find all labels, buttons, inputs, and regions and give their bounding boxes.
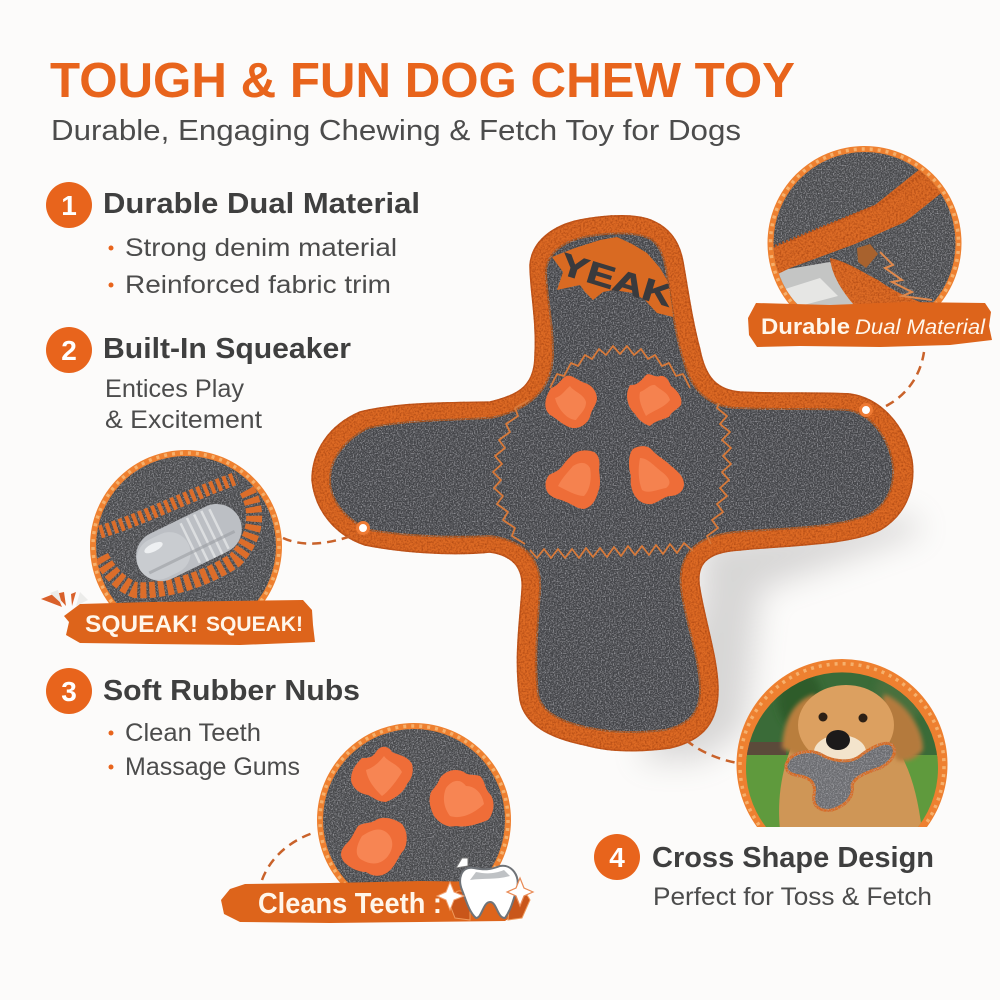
rubber nub bottom-right	[629, 446, 684, 504]
rubber nub top-right	[627, 374, 681, 426]
callout banner: cleans teeth: Cleans Teeth :	[258, 888, 442, 920]
feature 4: cross shape design: 4	[609, 842, 625, 873]
feature 2: built-in squeaker	[46, 327, 351, 434]
cross-shaped chew toy	[312, 216, 913, 751]
detail circle: dog with toy	[736, 659, 950, 830]
dashed connector to dog photo	[686, 740, 738, 763]
dog	[779, 685, 923, 830]
squeaker capsule	[136, 504, 242, 582]
dashed connector to nubs	[262, 832, 316, 880]
detail circle: squeaker	[90, 450, 282, 604]
detail circle: rubber nubs	[317, 723, 511, 883]
callout banner: squeak squeak	[64, 600, 315, 645]
callout banner: cleans teeth	[221, 881, 522, 923]
feature 2: built-in squeaker: Built-In Squeaker	[103, 333, 351, 365]
detail circle: fabric trim	[768, 146, 962, 305]
rubber nub bottom-left	[545, 450, 600, 509]
icon: tooth with sparkles	[437, 858, 533, 920]
callout banner: durable dual material	[748, 302, 992, 347]
feature 4: cross shape design: Perfect for Toss & Fetch	[653, 883, 932, 911]
feature 1: durable dual material: 1	[61, 190, 77, 221]
rubber nub top-left	[545, 376, 597, 428]
title: TOUGH & FUN DOG CHEW TOY	[50, 54, 795, 108]
YEAK logo	[552, 237, 678, 317]
feature 3: soft rubber nubs	[46, 668, 360, 781]
feature 1: durable dual material: Durable Dual Material	[103, 188, 420, 220]
attachment dot right	[860, 404, 872, 416]
feature 3: soft rubber nubs: Clean Teeth	[125, 719, 261, 747]
feature 1: durable dual material	[46, 182, 420, 299]
callout banner: squeak squeak: SQUEAK!	[206, 613, 303, 636]
callout banner: durable dual material: Dual Material	[855, 316, 986, 339]
feature 2: built-in squeaker: Entices Play	[105, 375, 245, 403]
feature 3: soft rubber nubs: 3	[61, 676, 77, 707]
feature 3: soft rubber nubs: Massage Gums	[125, 753, 300, 781]
feature 4: cross shape design: Cross Shape Design	[652, 842, 934, 874]
squeak burst rays	[41, 590, 88, 607]
feature 1: durable dual material: Strong denim material	[125, 234, 397, 262]
feature 1: durable dual material: Reinforced fabric trim	[125, 271, 391, 299]
nub right	[430, 770, 494, 827]
dashed connector to durable callout	[886, 352, 924, 406]
YEAK logo: YEAK	[556, 246, 678, 314]
toy grey denim body	[330, 233, 893, 732]
nub lower	[341, 818, 407, 876]
nub upper	[351, 747, 413, 802]
toy orange fabric trim	[312, 216, 913, 751]
callout banner: squeak squeak: SQUEAK!	[85, 611, 198, 638]
feature 3: soft rubber nubs: Soft Rubber Nubs	[103, 675, 360, 707]
toy drop shadow	[640, 515, 925, 760]
callout banner: durable dual material: Durable	[761, 314, 850, 339]
attachment dot left	[358, 522, 368, 534]
feature 2: built-in squeaker: & Excitement	[105, 406, 262, 434]
subtitle: Durable, Engaging Chewing & Fetch Toy for Dogs	[51, 115, 741, 147]
dashed connector to squeaker	[283, 534, 357, 544]
feature 2: built-in squeaker: 2	[61, 335, 77, 366]
zigzag stitching around centre	[493, 346, 731, 558]
mini toy in mouth	[786, 743, 894, 810]
feature 4: cross shape design	[594, 834, 934, 911]
